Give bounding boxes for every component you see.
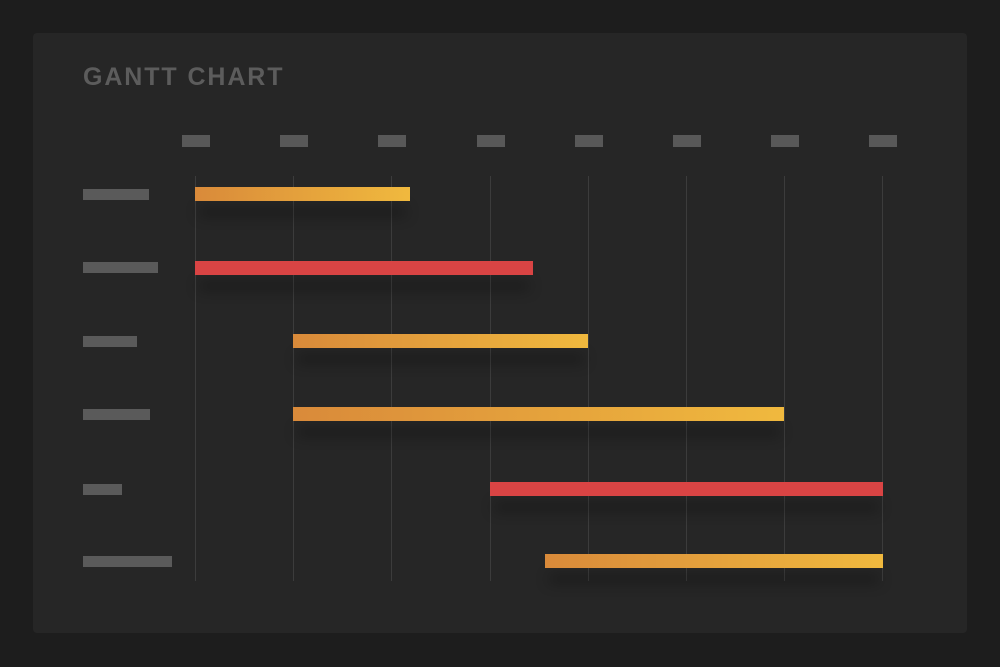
- column headers: [182, 135, 897, 147]
- row labels: [83, 189, 172, 567]
- gantt bars: [195, 187, 883, 581]
- title: GANTT CHART: [83, 63, 284, 91]
